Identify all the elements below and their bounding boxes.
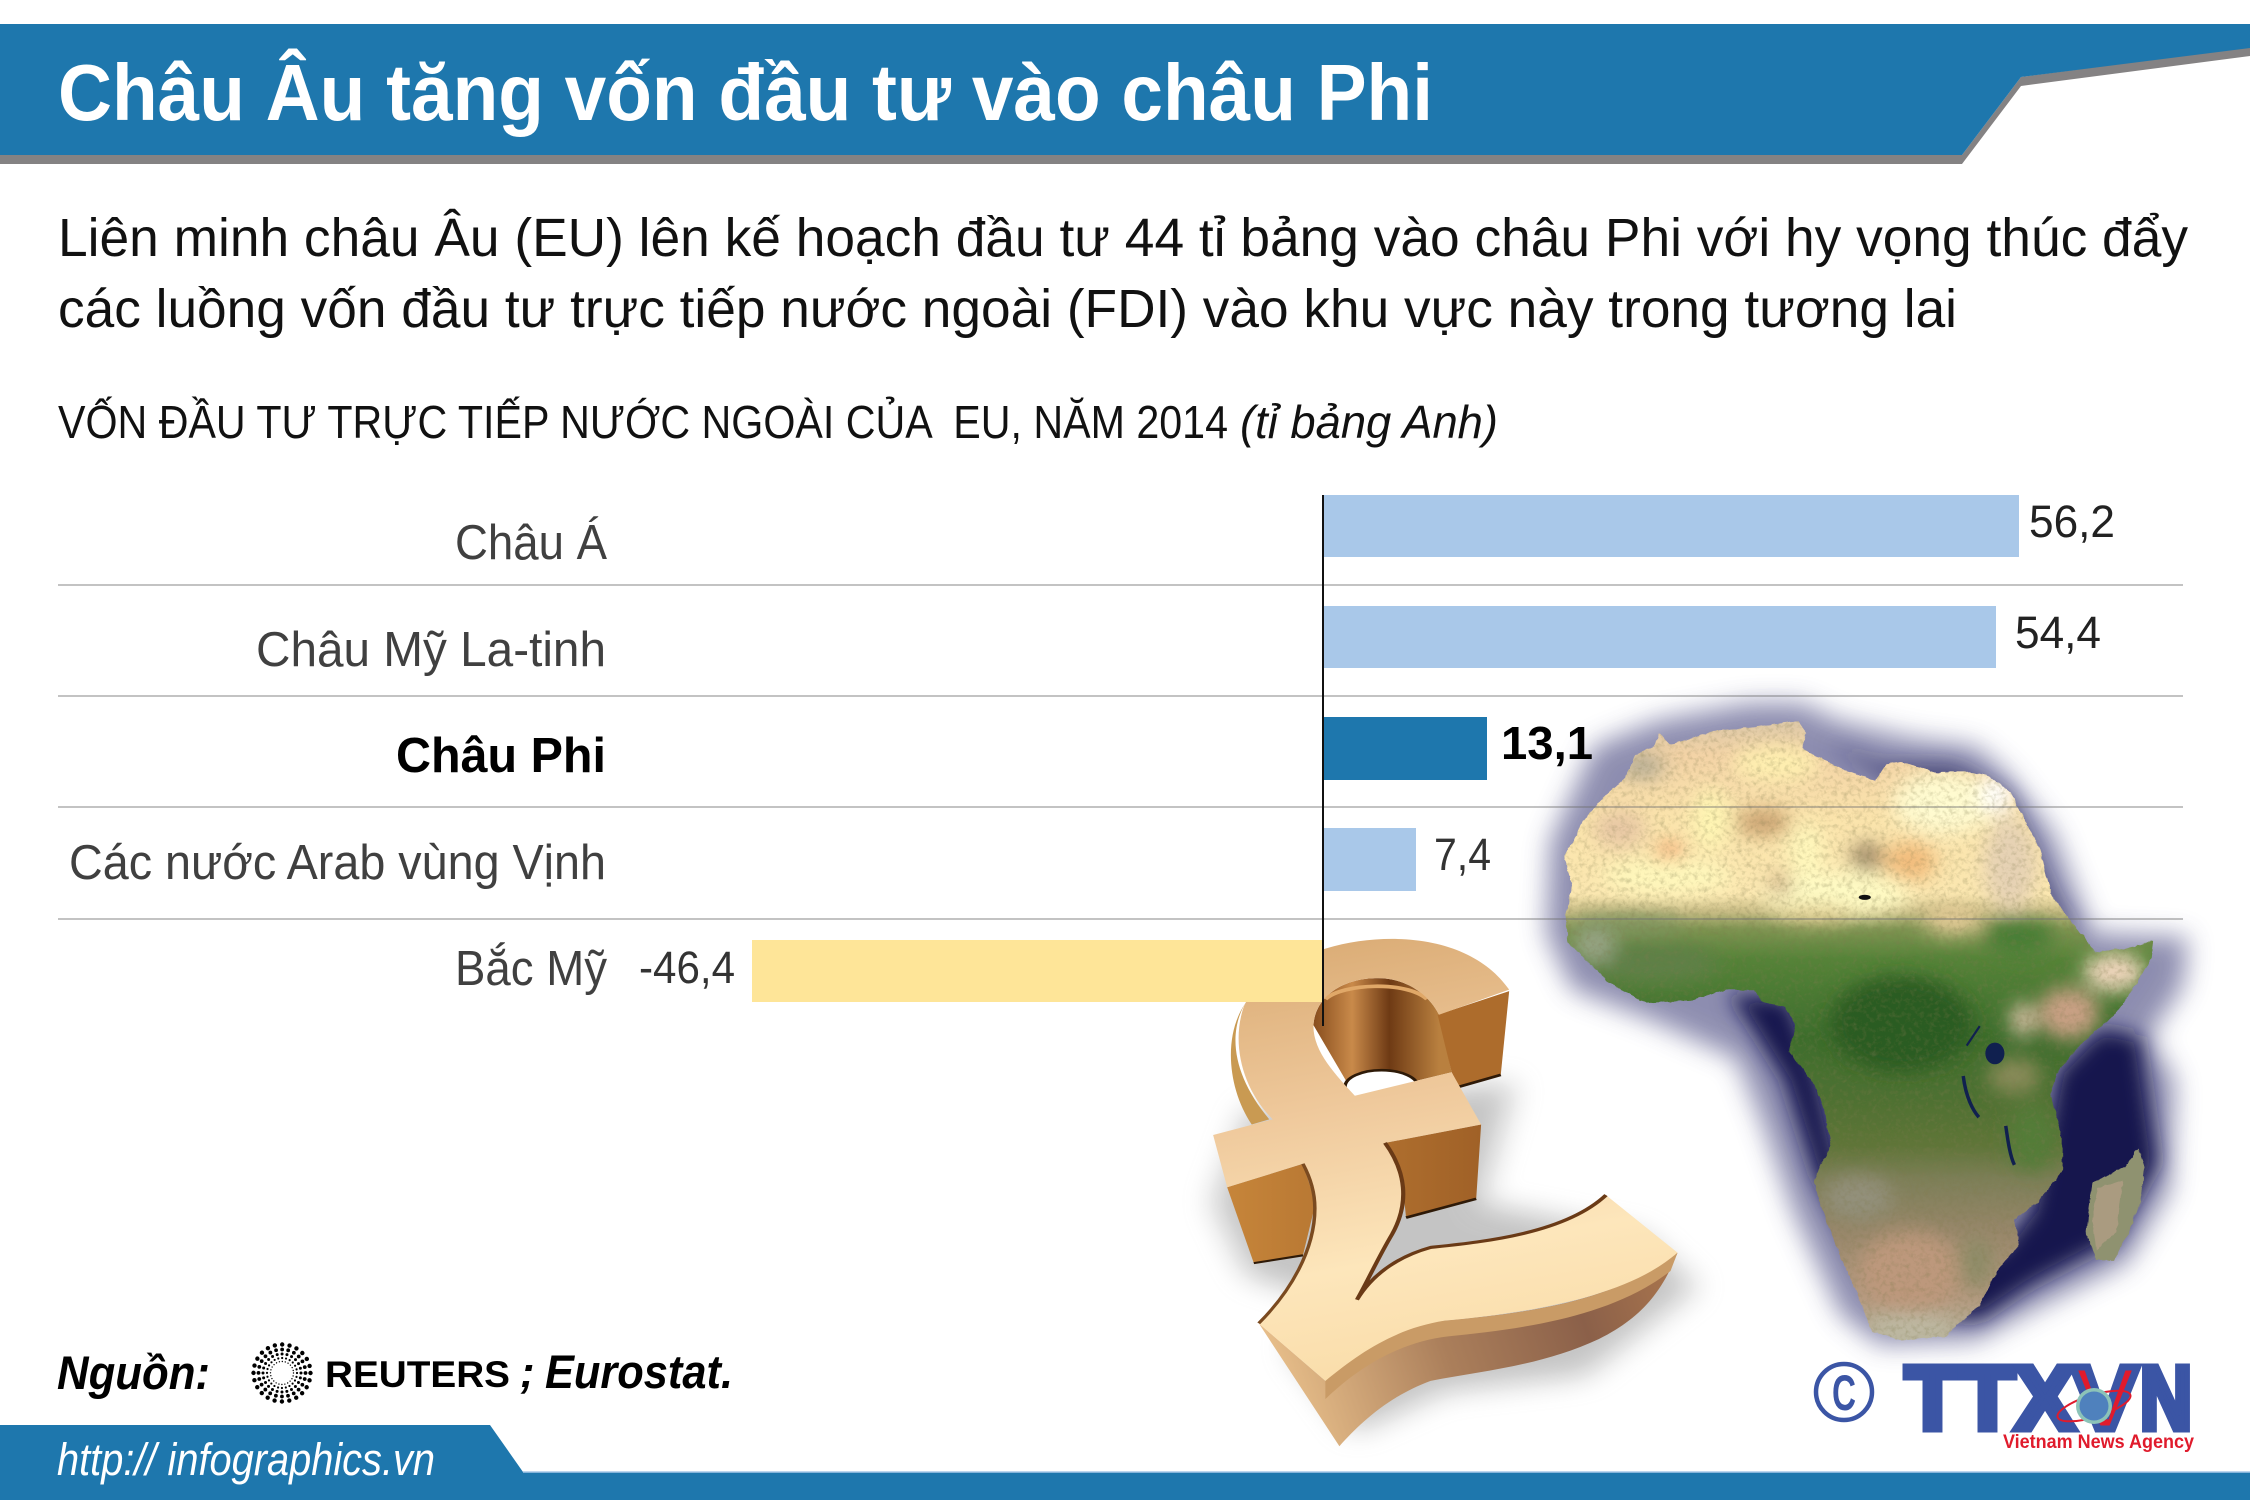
africa shadow <box>1546 703 2188 1345</box>
wordmark: N <box>2140 1349 2192 1449</box>
bar: Châu Phi <box>1323 717 1593 780</box>
footer band <box>0 1425 2250 1500</box>
source line: Eurostat. <box>545 1345 733 1398</box>
icon: copyright mark <box>1816 1364 1872 1421</box>
bar chart <box>69 495 2115 1026</box>
chart heading: VỐN ĐẦU TƯ TRỰC TIẾP NƯỚC NGOÀI CỦA EU, NĂM 2014 <box>58 396 1228 448</box>
africa landmass <box>1559 716 2166 1345</box>
logo: TTXVN <box>1816 1349 2194 1453</box>
chart heading: (tỉ bảng Anh) <box>1240 396 1498 448</box>
tagline: Vietnam News Agency <box>2003 1432 2194 1453</box>
wordmark: TTX <box>1905 1349 2075 1449</box>
row labels: Các nước Arab vùng Vịnh <box>69 836 606 890</box>
intro text: các luồng vốn đầu tư trực tiếp nước ngoài (FDI) vào khu vực này trong tương lai <box>58 279 1957 339</box>
lower body side <box>1259 1253 1678 1446</box>
bevel band <box>1325 1253 1678 1399</box>
top face <box>1213 939 1678 1381</box>
row separator lines <box>58 585 2183 919</box>
axis line <box>1322 495 1324 1026</box>
bar: Châu Á: 56,2 <box>2029 496 2115 547</box>
africa map <box>1546 703 2188 1345</box>
source line: REUTERS <box>325 1354 510 1395</box>
madagascar <box>2086 1148 2145 1260</box>
row labels <box>69 516 607 996</box>
wordmark: V <box>2072 1349 2138 1449</box>
source line: ; <box>520 1348 535 1397</box>
bar: Các nước Arab vùng Vịnh <box>1323 828 1491 891</box>
pound shadow <box>1213 1083 1697 1433</box>
hollow of the hook <box>1313 978 1452 1096</box>
header banner <box>0 24 2250 164</box>
wordmark <box>1905 1349 2192 1449</box>
icon: reuters dots <box>254 1344 310 1402</box>
lakes <box>1859 895 2014 1165</box>
row labels: Châu Phi <box>396 729 606 783</box>
icon: copyright mark: C <box>1832 1365 1856 1421</box>
crossbar sides <box>1385 1125 1481 1218</box>
dark outer edge <box>1259 1164 1315 1323</box>
bar: Châu Á <box>1323 495 2115 557</box>
row labels: Châu Á <box>455 516 607 570</box>
intro text: Liên minh châu Âu (EU) lên kế hoạch đầu tư 44 tỉ bảng vào châu Phi với hy vọng thúc đẩy <box>58 208 2188 268</box>
pound sign <box>1213 939 1697 1446</box>
bar: Châu Mỹ La-tinh <box>1323 606 2101 668</box>
row labels: Châu Mỹ La-tinh <box>256 623 606 677</box>
intro text <box>58 208 2188 339</box>
bar: Châu Mỹ La-tinh: 54,4 <box>2015 607 2101 658</box>
bar: Bắc Mỹ: -46,4 <box>639 942 735 993</box>
icon: globe with orbit <box>2054 1384 2134 1428</box>
bar: Châu Phi: 13,1 <box>1501 717 1593 769</box>
source line: Nguồn: <box>57 1346 210 1399</box>
hook side <box>1438 991 1509 1087</box>
dark inner edge <box>1357 1143 1606 1300</box>
bar: Các nước Arab vùng Vịnh: 7,4 <box>1434 829 1491 880</box>
title: Châu Âu tăng vốn đầu tư vào châu Phi <box>58 48 1433 137</box>
website url: http:// infographics.vn <box>57 1434 435 1485</box>
bar: Bắc Mỹ <box>639 940 1323 1002</box>
row labels: Bắc Mỹ <box>455 942 607 996</box>
source line <box>57 1344 733 1402</box>
left edge side <box>1231 1004 1269 1125</box>
